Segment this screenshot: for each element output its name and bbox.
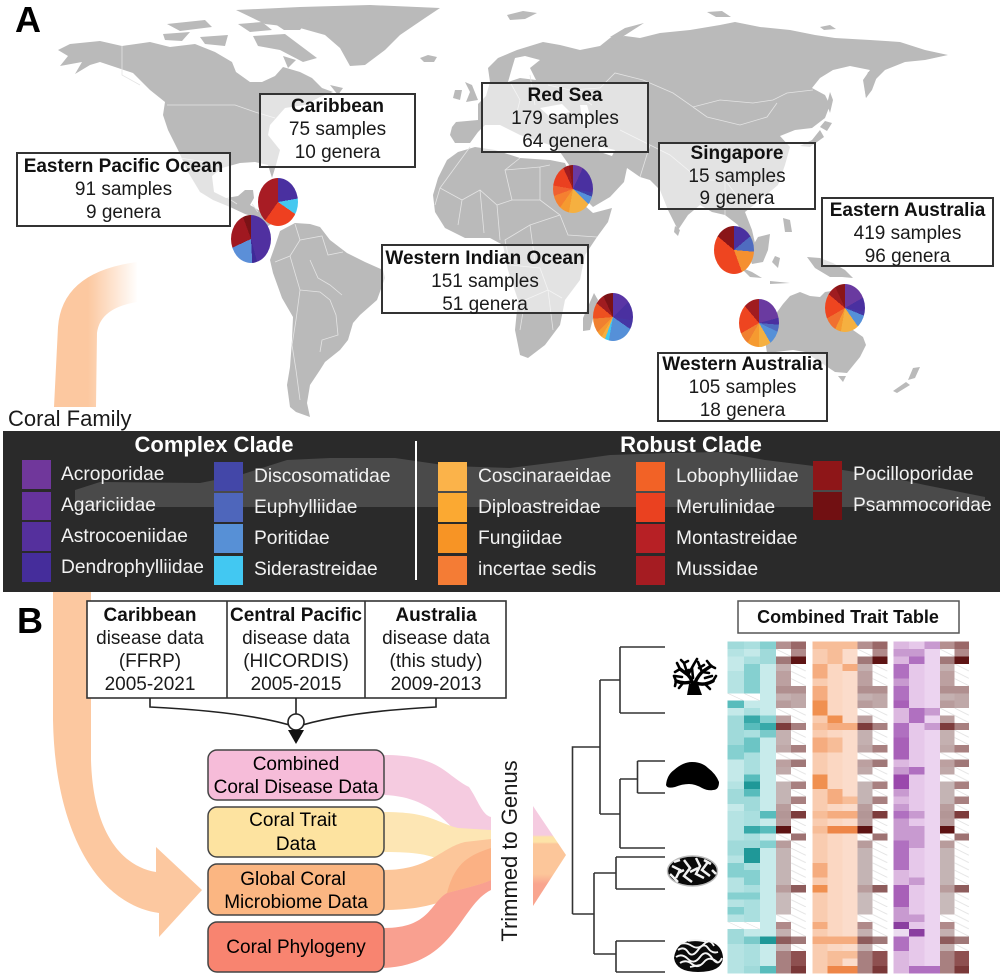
callout: Eastern Pacific Ocean: Eastern Pacific Ocean [24, 156, 223, 177]
arrow: merge connector [150, 698, 436, 744]
Africa [433, 147, 612, 358]
panel: coral family legend [3, 431, 1000, 592]
text: Central Pacific source: Central Pacific [230, 605, 362, 626]
box: combined coral disease data [208, 750, 384, 800]
callout: Eastern Australia [821, 197, 994, 267]
legend: robust clade families column 3: Pocilloporidae [853, 464, 974, 485]
callout: Caribbean: 75 samples [289, 119, 386, 140]
arrow: trimmed chevron [533, 806, 566, 906]
callout: Caribbean: Caribbean [291, 96, 384, 117]
text: Australia source: disease data [382, 628, 490, 649]
icon: branching coral [674, 659, 716, 695]
pie: Eastern Pacific Ocean [231, 215, 271, 263]
text: Central Pacific source: disease data [242, 628, 350, 649]
callout: Eastern Australia: Eastern Australia [830, 200, 985, 221]
arrow: microbiome data into workflow [53, 592, 202, 937]
heading: complex clade: Complex Clade [135, 432, 293, 457]
box: coral trait data [208, 807, 384, 857]
legend: robust clade families column 2: Lobophylliidae [676, 466, 799, 487]
legend: robust clade families column 2: Montastreidae [676, 528, 798, 549]
callout: Red Sea: 179 samples [511, 108, 619, 129]
pie: Western Australia [739, 299, 779, 347]
Australia [765, 290, 866, 373]
icon: brain coral 1 [668, 856, 718, 886]
chart: teal group categorical columns [776, 642, 806, 973]
seas [508, 56, 615, 156]
legend: robust clade families column 1: Diploastreidae [478, 497, 601, 518]
callout: Red Sea [481, 82, 649, 153]
callout: Eastern Pacific Ocean [16, 152, 231, 227]
New Guinea [807, 257, 853, 278]
callout: Western Indian Ocean [381, 244, 589, 314]
North America [58, 41, 333, 226]
British Isles [453, 82, 478, 102]
Arctic Russia islands [507, 11, 836, 41]
callout: Eastern Pacific Ocean: 91 samples [75, 179, 172, 200]
pie: Caribbean [258, 178, 298, 226]
chart: purple phylogeny heat map [894, 642, 940, 973]
legend: complex clade families column 2: Euphylliidae [254, 497, 357, 518]
chart: phylogenetic tree [572, 647, 665, 972]
legend: complex clade families column 2: Poritidae [254, 528, 330, 549]
legend: complex clade families column 2: Discosomatidae [254, 466, 391, 487]
callout: Singapore [658, 142, 816, 210]
box: coral trait data: Coral Trait [249, 810, 338, 831]
legend: robust clade families column 3: Psammocoridae [853, 495, 992, 516]
heat map orange trait columns [812, 642, 858, 973]
chart: orange group categorical columns [858, 642, 888, 973]
legend: complex clade families column 2: Siderastreidae [254, 559, 378, 580]
box: combined trait table title: Combined Trait Table [757, 607, 939, 627]
legend: complex clade families column 1: Agariciidae [61, 495, 156, 516]
box: combined trait table title [738, 601, 959, 633]
chart: teal disease heat map [728, 642, 776, 973]
callout: Western Australia: 105 samples [689, 377, 796, 398]
flow: trait data [384, 812, 491, 863]
text: Central Pacific source: 2005-2015 [251, 674, 341, 695]
box: combined coral disease data: Coral Disease Data [214, 777, 379, 798]
callout: Western Indian Ocean: 51 genera [442, 294, 528, 315]
callout: Eastern Australia: 419 samples [854, 223, 961, 244]
callout: Caribbean [259, 93, 416, 168]
Sri Lanka [674, 226, 680, 236]
table: disease data sources [87, 601, 506, 698]
pie: Eastern Australia [825, 284, 865, 332]
pie: Western Indian Ocean [593, 293, 633, 341]
Madagascar [583, 293, 598, 331]
pie: Singapore [714, 226, 754, 274]
callout: Singapore: Singapore [691, 143, 783, 164]
callout: Western Australia: 18 genera [700, 400, 785, 421]
callout: Caribbean: 10 genera [295, 142, 380, 163]
text: Caribbean source: 2005-2021 [105, 674, 195, 695]
callout: Western Australia [657, 352, 828, 422]
callout: Singapore: 9 genera [699, 188, 774, 209]
callout: Red Sea: Red Sea [528, 85, 602, 106]
text: Australia source: (this study) [390, 651, 482, 672]
flows: data streams [384, 755, 491, 968]
Eurasia [450, 22, 948, 252]
box: coral phylogeny [208, 922, 384, 972]
Kuril and Kamchatka [864, 72, 878, 98]
Iceland [420, 55, 437, 62]
Arctic islands [163, 18, 343, 95]
callout: Western Australia: Western Australia [662, 354, 823, 375]
callout: Eastern Australia: 96 genera [865, 246, 950, 267]
legend: robust clade families column 1: incertae sedis [478, 559, 596, 580]
flow: phylogeny data [384, 880, 491, 968]
icon: brain coral 2 [674, 940, 723, 972]
heading: panel A label: A [15, 0, 41, 40]
callout: Western Indian Ocean: Western Indian Ocean [385, 248, 585, 269]
world map [58, 5, 948, 417]
Japan and Sakhalin [800, 92, 833, 147]
box: combined coral disease data: Combined [253, 754, 339, 775]
text: Australia source [382, 605, 490, 695]
box: coral trait data: Data [276, 834, 316, 855]
legend: robust clade families column 2: Mussidae [676, 559, 758, 580]
legend: robust clade families column 3 [813, 461, 992, 520]
legend: complex clade families column 2 [214, 462, 391, 585]
Greenland [236, 5, 440, 66]
text: Caribbean source: (FFRP) [119, 651, 181, 672]
text: Caribbean source: disease data [96, 628, 204, 649]
box: coral phylogeny: Coral Phylogeny [226, 937, 366, 958]
chart: purple group categorical columns [940, 642, 969, 973]
arrow: coral family fading curve [54, 262, 137, 407]
South America [270, 223, 385, 417]
legend: complex clade families column 1: Astrocoeniidae [61, 526, 188, 547]
heading: panel B label: B [17, 600, 43, 641]
icon: massive coral silhouette [666, 762, 719, 790]
Tasmania and New Zealand [838, 367, 920, 393]
text: Central Pacific source: (HICORDIS) [243, 651, 349, 672]
legend: robust clade families column 1 [438, 462, 611, 585]
flow: disease data [384, 755, 491, 840]
box: global coral microbiome data [208, 864, 384, 915]
callout: Eastern Pacific Ocean: 9 genera [86, 202, 161, 223]
chart: orange microbiome heat map [812, 642, 858, 973]
country borders [122, 46, 813, 400]
flow: microbiome data [384, 839, 491, 910]
text: Central Pacific source [230, 605, 362, 695]
legend: complex clade families column 1: Dendrophylliidae [61, 557, 204, 578]
text: coral family label: Coral Family [8, 406, 131, 431]
legend: robust clade families column 2: Merulinidae [676, 497, 775, 518]
box: global coral microbiome data: Global Coral [240, 869, 346, 890]
legend: complex clade families column 1 [22, 460, 204, 582]
text: trimmed to genus: Trimmed to Genus [497, 760, 522, 942]
text: Caribbean source [96, 605, 204, 695]
text: Australia source: 2009-2013 [391, 674, 481, 695]
legend: robust clade families column 1: Coscinaraeidae [478, 466, 611, 487]
box: global coral microbiome data: Microbiome Data [224, 892, 368, 913]
heat map teal trait columns [728, 642, 776, 973]
legend: complex clade families column 1: Acroporidae [61, 464, 164, 485]
callout: Red Sea: 64 genera [522, 131, 608, 152]
Indonesia and Philippines [740, 218, 792, 284]
heat map purple trait columns [894, 642, 940, 973]
text: Australia source: Australia [395, 605, 477, 626]
legend: robust clade families column 2 [636, 462, 799, 585]
heading: robust clade: Robust Clade [620, 432, 762, 457]
text: Caribbean source: Caribbean [104, 605, 196, 626]
callout: Western Indian Ocean: 151 samples [431, 271, 539, 292]
legend: robust clade families column 1: Fungiidae [478, 528, 562, 549]
pie: Red Sea [553, 165, 593, 213]
callout: Singapore: 15 samples [688, 166, 786, 186]
